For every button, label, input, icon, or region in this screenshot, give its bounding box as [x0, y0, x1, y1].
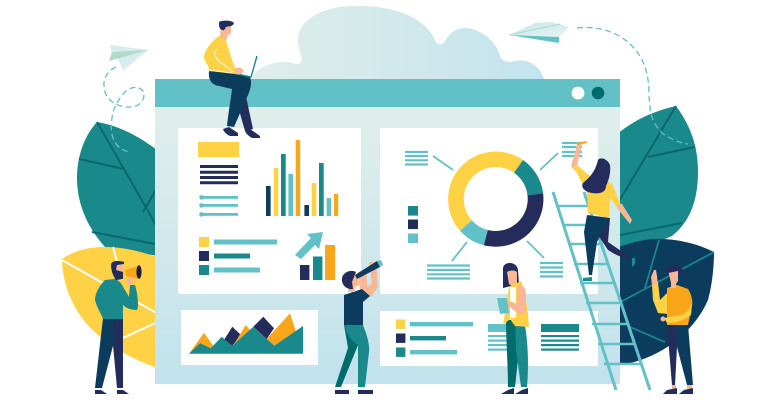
hand and finger — [651, 270, 658, 285]
icon: paper plane right — [509, 22, 569, 43]
hair — [503, 263, 519, 288]
raised arm — [571, 142, 584, 174]
shoes — [583, 258, 635, 281]
face — [220, 23, 231, 40]
arrow: growth — [295, 232, 323, 259]
person: woman with tablet — [497, 263, 529, 394]
text lines: top right — [562, 143, 582, 156]
window header bar — [155, 79, 620, 107]
connector lines — [433, 153, 558, 261]
orange shirt — [667, 285, 692, 325]
bar chart: grouped bars — [266, 140, 338, 216]
megaphone rim — [136, 265, 142, 279]
panel: donut chart — [380, 128, 598, 294]
yellow heading block — [198, 142, 239, 157]
person: man with megaphone — [95, 261, 142, 394]
back leg — [335, 325, 358, 387]
hair and beard — [111, 261, 124, 280]
shoes — [663, 388, 693, 394]
browser window panel — [155, 79, 620, 384]
person: woman on ladder — [571, 141, 635, 281]
lower arm — [617, 202, 632, 224]
window button: white — [572, 87, 584, 99]
shirt — [344, 289, 370, 325]
legend rows — [396, 320, 473, 357]
left trouser leg — [667, 325, 677, 385]
panel: area chart — [181, 310, 318, 365]
back trouser leg — [506, 320, 518, 387]
face — [114, 264, 124, 279]
yellow sweater — [204, 36, 235, 74]
person: man with telescope — [335, 260, 383, 394]
megaphone — [125, 266, 138, 279]
hair — [665, 265, 683, 277]
front leg — [345, 325, 369, 387]
shoes — [335, 390, 373, 394]
near arm — [358, 270, 368, 292]
front trouser leg — [515, 320, 528, 387]
raised arm — [652, 282, 668, 314]
white shirt — [510, 287, 516, 318]
panel: legend and tables — [380, 311, 598, 366]
hair — [219, 21, 234, 30]
back leg — [598, 218, 630, 259]
left trouser leg — [95, 318, 114, 388]
navy text lines — [200, 166, 238, 183]
dashed flight path: left — [104, 67, 144, 152]
cloud — [251, 6, 544, 79]
front leg — [584, 215, 610, 275]
right trouser leg — [110, 318, 123, 388]
hair — [342, 271, 356, 289]
feet — [672, 385, 692, 389]
window button: dark teal — [592, 87, 604, 99]
text lines: bottom left — [427, 266, 470, 278]
teal slider lines — [199, 195, 238, 217]
far arm — [364, 262, 378, 297]
leaf: right dark navy — [610, 239, 714, 363]
face — [668, 270, 678, 288]
text lines: top left — [405, 152, 428, 164]
mountain area chart — [189, 313, 303, 354]
pencil — [576, 141, 587, 145]
face — [507, 270, 517, 288]
sweater — [95, 279, 138, 319]
growth bars — [300, 245, 335, 280]
yellow top — [573, 165, 620, 218]
arm — [507, 285, 526, 315]
person: man in orange shirt — [651, 265, 693, 394]
legend squares — [408, 206, 418, 243]
shoes — [95, 390, 129, 394]
shoes — [501, 388, 528, 394]
table: light teal — [488, 324, 512, 351]
tablet — [497, 298, 509, 314]
front leg — [209, 71, 251, 127]
legend: three rows — [199, 237, 277, 275]
face — [348, 275, 359, 292]
hand on waist — [660, 316, 666, 322]
table: dark teal — [541, 324, 579, 351]
leaf: left green — [77, 122, 170, 258]
laptop — [233, 56, 257, 77]
ladder — [553, 192, 650, 390]
vest — [503, 281, 529, 327]
leaf: left yellow — [62, 247, 170, 372]
back leg — [237, 92, 253, 131]
hand — [126, 277, 134, 285]
panel: bar charts and legends — [178, 128, 361, 294]
text lines: bottom right — [540, 263, 563, 276]
icon: paper plane left — [109, 45, 148, 71]
donut chart — [448, 151, 543, 247]
long hair — [582, 158, 610, 193]
person: man sitting with laptop — [204, 21, 260, 138]
sweater folds — [209, 49, 233, 73]
sleeve — [664, 303, 692, 323]
telescope — [355, 260, 383, 279]
leaf: right green — [610, 106, 698, 252]
right trouser leg — [675, 325, 693, 385]
dashed flight path: right — [577, 28, 688, 144]
shoes — [223, 127, 260, 138]
hand — [232, 68, 244, 74]
